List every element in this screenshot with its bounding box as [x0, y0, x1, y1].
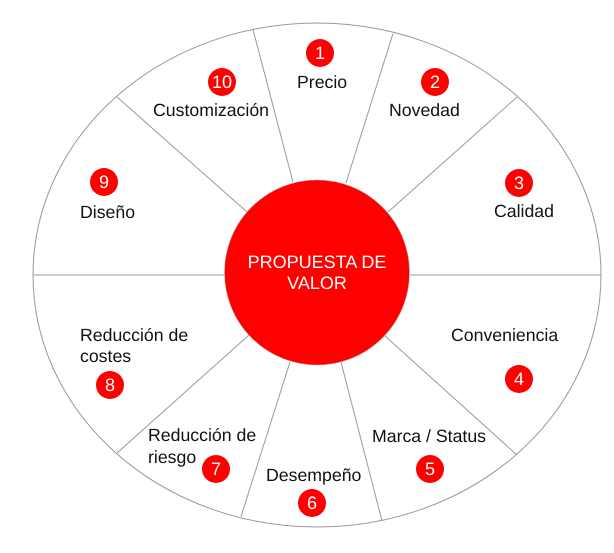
segment 8: Reducción de costes: costes — [80, 346, 131, 366]
segment 3: Calidad: Calidad — [494, 201, 554, 221]
segment 5: Marca / Status — [372, 426, 486, 483]
segment 8: Reducción de costes — [80, 325, 188, 399]
segment 4: Conveniencia: 4 — [514, 369, 524, 389]
segment 2: Novedad — [389, 68, 460, 120]
segment 6: Desempeño: 6 — [307, 493, 317, 513]
segment 7: Reducción de riesgo: 7 — [211, 459, 221, 479]
segment 2: Novedad: Novedad — [389, 100, 460, 120]
segment 1: Precio: Precio — [297, 72, 347, 92]
segment 4: Conveniencia: Conveniencia — [451, 325, 558, 345]
segment 3: Calidad — [494, 169, 554, 221]
segment 7: Reducción de riesgo: riesgo — [148, 447, 196, 467]
segment 5: Marca / Status: 5 — [425, 459, 435, 479]
segment 6: Desempeño: Desempeño — [266, 465, 362, 485]
segment 8: Reducción de costes: Reducción de — [80, 325, 188, 345]
segment 8: Reducción de costes: 8 — [105, 375, 115, 395]
segment 3: Calidad: 3 — [514, 173, 524, 193]
segment 10: Customización: Customización — [153, 100, 269, 120]
segment 9: Diseño — [80, 168, 135, 222]
center circle: propuesta de valor: PROPUESTA DE — [248, 252, 386, 272]
segment 4: Conveniencia — [451, 325, 558, 393]
segment 7: Reducción de riesgo — [148, 425, 256, 483]
center circle: propuesta de valor: VALOR — [287, 273, 347, 293]
segment 2: Novedad: 2 — [430, 72, 440, 92]
center circle: propuesta de valor — [224, 180, 410, 365]
segment 7: Reducción de riesgo: Reducción de — [148, 425, 256, 445]
segment 9: Diseño: 9 — [99, 172, 109, 192]
segment 10: Customización: 10 — [212, 72, 232, 92]
segment 5: Marca / Status: Marca / Status — [372, 426, 486, 446]
segment 1: Precio: 1 — [315, 43, 325, 63]
segment 6: Desempeño — [266, 465, 362, 517]
segment 9: Diseño: Diseño — [80, 202, 135, 222]
segment 10: Customización — [153, 68, 269, 120]
segment 1: Precio — [297, 39, 347, 92]
